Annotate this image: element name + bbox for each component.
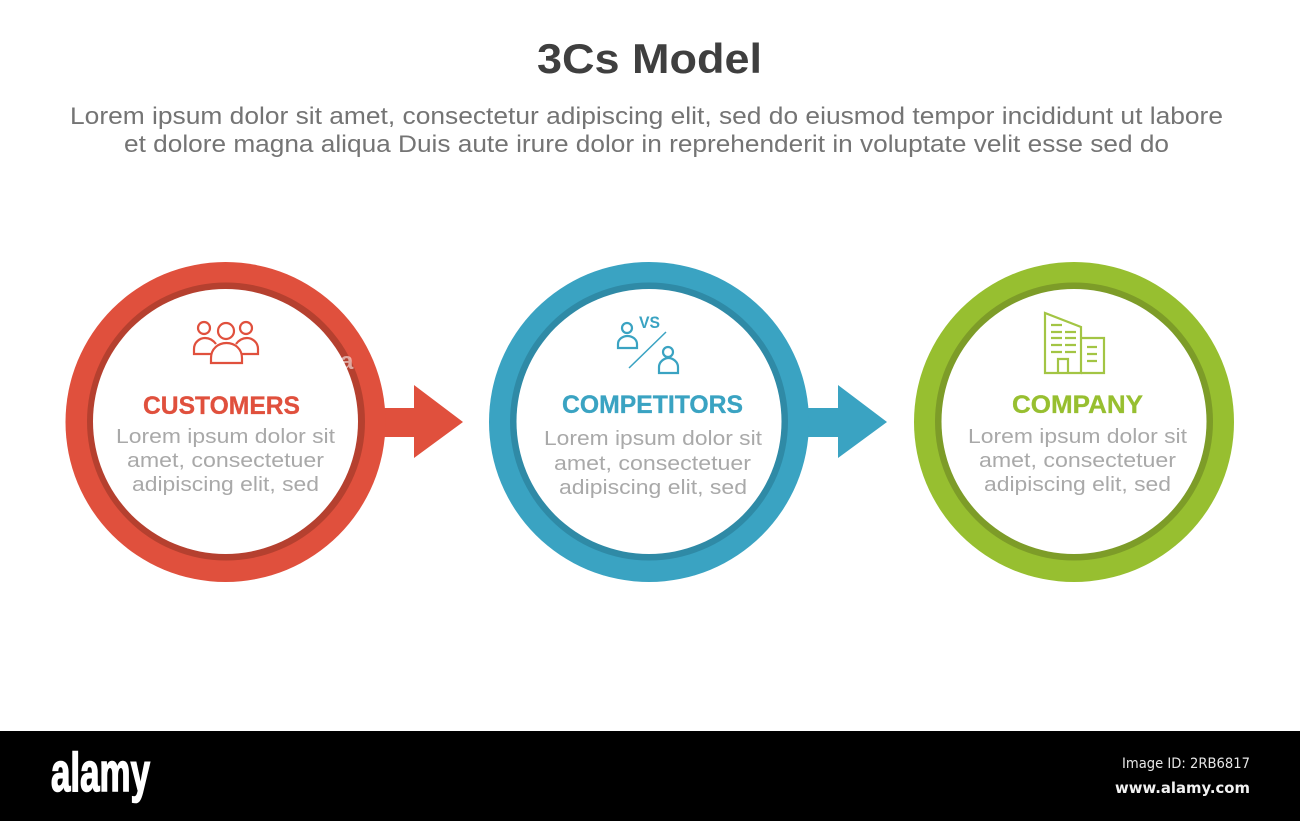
website: www.alamy.com — [1115, 779, 1250, 797]
body text: competitors: amet, consectetuer — [554, 452, 751, 475]
body text: company: Lorem ipsum dolor sit — [968, 425, 1187, 448]
arrow: customers to competitors — [380, 385, 463, 458]
ring: customers — [66, 262, 386, 582]
title: 3Cs Model — [537, 35, 762, 82]
panel: customers — [66, 262, 463, 582]
body text: customers: Lorem ipsum dolor sit — [116, 425, 335, 448]
heading: company: COMPANY — [1012, 391, 1143, 419]
icon: three people — [194, 322, 258, 363]
ring: competitors — [489, 262, 809, 582]
ring: company — [914, 262, 1234, 582]
ring: customers: a — [340, 348, 354, 375]
subtitle text block: et dolore magna aliqua Duis aute irure dolor in reprehenderit in voluptate velit esse sed do — [124, 131, 1169, 158]
body text: company: amet, consectetuer — [979, 449, 1176, 472]
body text: competitors — [544, 427, 762, 499]
logo: alamy: alamy — [51, 741, 150, 803]
body text: company: adipiscing elit, sed — [984, 473, 1171, 496]
icon: versus people — [618, 313, 678, 373]
heading: customers: CUSTOMERS — [143, 392, 300, 420]
subtitle text block — [70, 103, 1223, 158]
panel: company — [914, 262, 1234, 582]
image id: Image ID: 2RB6817 — [1122, 756, 1250, 772]
panel: competitors — [489, 262, 887, 582]
body text: customers: adipiscing elit, sed — [132, 473, 319, 496]
body text: competitors: Lorem ipsum dolor sit — [544, 427, 762, 450]
icon: versus people: VS — [639, 313, 660, 332]
icon: office buildings — [1045, 313, 1104, 373]
footer bar — [0, 731, 1300, 821]
body text: customers: amet, consectetuer — [127, 449, 324, 472]
body text: competitors: adipiscing elit, sed — [559, 476, 747, 499]
body text: company — [968, 425, 1187, 496]
arrow: competitors to company — [803, 385, 887, 458]
body text: customers — [116, 425, 335, 496]
subtitle text block: Lorem ipsum dolor sit amet, consectetur adipiscing elit, sed do eiusmod tempor incididunt ut labore — [70, 103, 1223, 130]
heading: competitors: COMPETITORS — [562, 391, 743, 419]
